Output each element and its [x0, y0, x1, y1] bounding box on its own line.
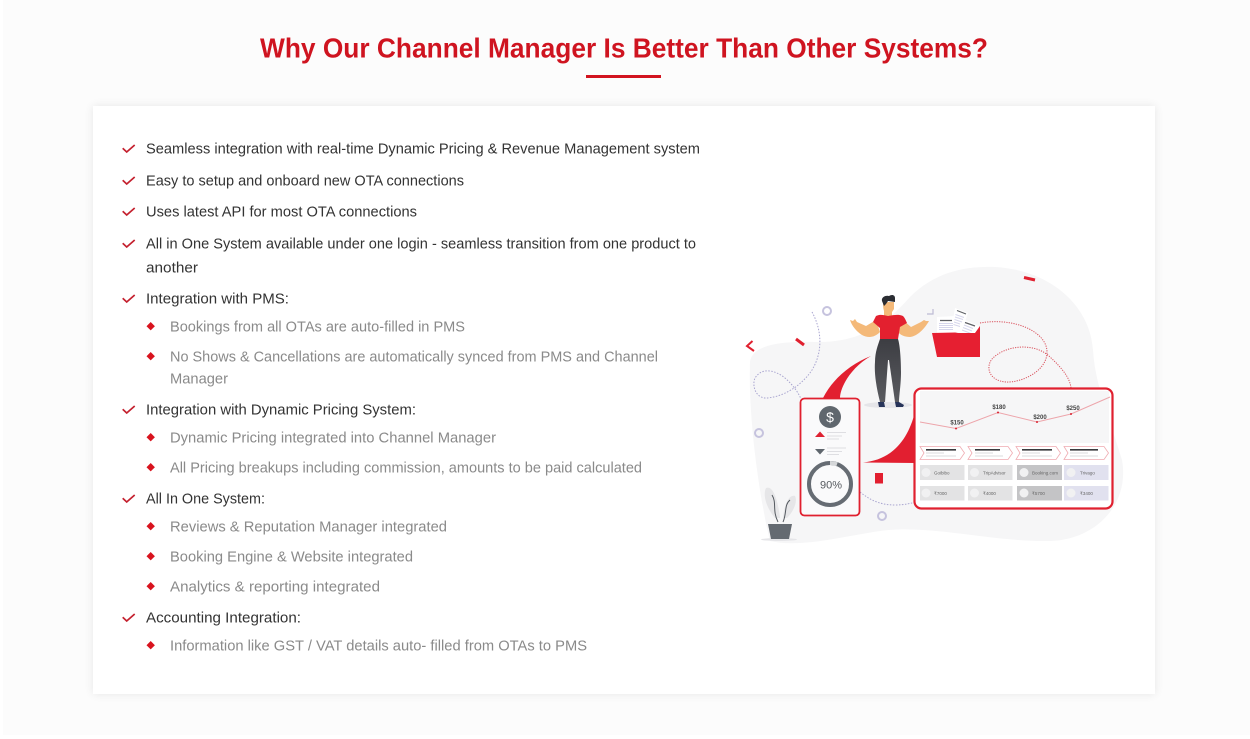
purple dotted path [754, 312, 820, 399]
platform tiles: Booking.com [1032, 470, 1058, 476]
platform tiles: Trivago [1080, 470, 1095, 476]
item: integration with dynamic pricing: Integration with Dynamic Pricing System: [146, 402, 416, 418]
decorative corner mark [927, 309, 933, 314]
red swoosh to dashboard [863, 412, 915, 463]
platform tiles: ₹4000 [983, 491, 996, 496]
sub-item: reviews: Reviews & Reputation Manager integrated [170, 520, 447, 536]
item: accounting integration: Accounting Integration: [146, 610, 301, 626]
item: all in one login: All in One System available under one login - seamless transition from one product to [146, 236, 696, 252]
line chart: $180 [992, 405, 1006, 411]
item: all in one system: All In One System: [146, 492, 265, 508]
item: easy setup: Easy to setup and onboard new OTA connections [146, 174, 464, 190]
small text lines [827, 432, 846, 454]
person shoes [878, 402, 904, 407]
phone card: $ [826, 409, 834, 425]
platform tiles: ₹7000 [934, 491, 947, 496]
platform tiles: Goibibo [934, 470, 950, 476]
decorative circles [755, 307, 886, 520]
sub-item: bookings auto-filled: Bookings from all OTAs are auto-filled in PMS [170, 320, 465, 336]
sub-item: no shows synced [146, 350, 658, 388]
person head [883, 302, 894, 316]
sub-item: no shows synced: Manager [170, 372, 228, 388]
icon: dollar [819, 406, 841, 428]
item: dynamic pricing integration: Seamless integration with real-time Dynamic Pricing & Revenue Management system [146, 142, 700, 158]
icon: down triangle [815, 449, 825, 454]
sub-item: analytics: Analytics & reporting integrated [170, 580, 380, 596]
arrow step text lines [926, 449, 1098, 451]
person trousers [875, 339, 901, 402]
line chart: $150 [950, 420, 964, 426]
sub-item: GST VAT details: Information like GST / VAT details auto- filled from OTAs to PMS [170, 638, 587, 654]
person shadow [864, 402, 912, 408]
dashboard card [914, 388, 1112, 508]
platform tiles: TripAdvisor [983, 470, 1006, 476]
platform tiles [920, 465, 1108, 500]
arrow steps [920, 446, 1108, 460]
item: latest API: Uses latest API for most OTA connections [146, 204, 417, 220]
plant stems [772, 495, 790, 522]
person hair [882, 295, 895, 306]
red dotted path [980, 322, 1071, 388]
person [850, 295, 929, 408]
plant shadow [761, 538, 797, 541]
red square [875, 473, 883, 484]
sub-item: dynamic pricing integrated: Dynamic Pricing integrated into Channel Manager [170, 430, 496, 446]
item: integration with PMS: Integration with PMS: [146, 292, 289, 308]
person shirt [873, 315, 907, 339]
donut gauge [809, 463, 851, 505]
papers [937, 316, 955, 334]
item: all in one login [123, 236, 696, 276]
sub-item: pricing breakups: All Pricing breakups including commission, amounts to be paid calculated [170, 460, 642, 476]
icon: up triangle [815, 432, 825, 437]
purple dotted path lower [860, 492, 916, 505]
plant pot [768, 524, 792, 539]
person arms [850, 319, 929, 337]
platform tiles: ₹5700 [1032, 491, 1045, 496]
feature list [123, 142, 700, 654]
line chart: $200 [1033, 415, 1047, 421]
platform tiles: ₹3400 [1080, 491, 1093, 496]
title underline [586, 75, 661, 78]
phone card [800, 398, 860, 516]
folder with papers [932, 308, 980, 357]
line chart [920, 391, 1110, 443]
arrow step sub lines [926, 453, 1098, 456]
illustration [747, 267, 1123, 543]
folder [932, 326, 980, 357]
decorative red marks [747, 278, 1035, 351]
sub-item: booking engine: Booking Engine & Website integrated [170, 550, 413, 566]
plant leaves [765, 488, 796, 518]
title: Why Our Channel Manager Is Better Than Other Systems? [260, 32, 988, 64]
sub-item: no shows synced: No Shows & Cancellations are automatically synced from PMS and Channel [170, 350, 658, 366]
background blob [750, 267, 1123, 543]
phone card: 90% [820, 480, 842, 492]
item: all in one login: another [146, 260, 198, 276]
line chart: $250 [1066, 406, 1080, 412]
red swoosh to phone [823, 356, 871, 398]
paper text lines [939, 314, 973, 334]
plant [761, 488, 797, 541]
panel: card [93, 106, 1155, 694]
paper headings [940, 310, 975, 326]
